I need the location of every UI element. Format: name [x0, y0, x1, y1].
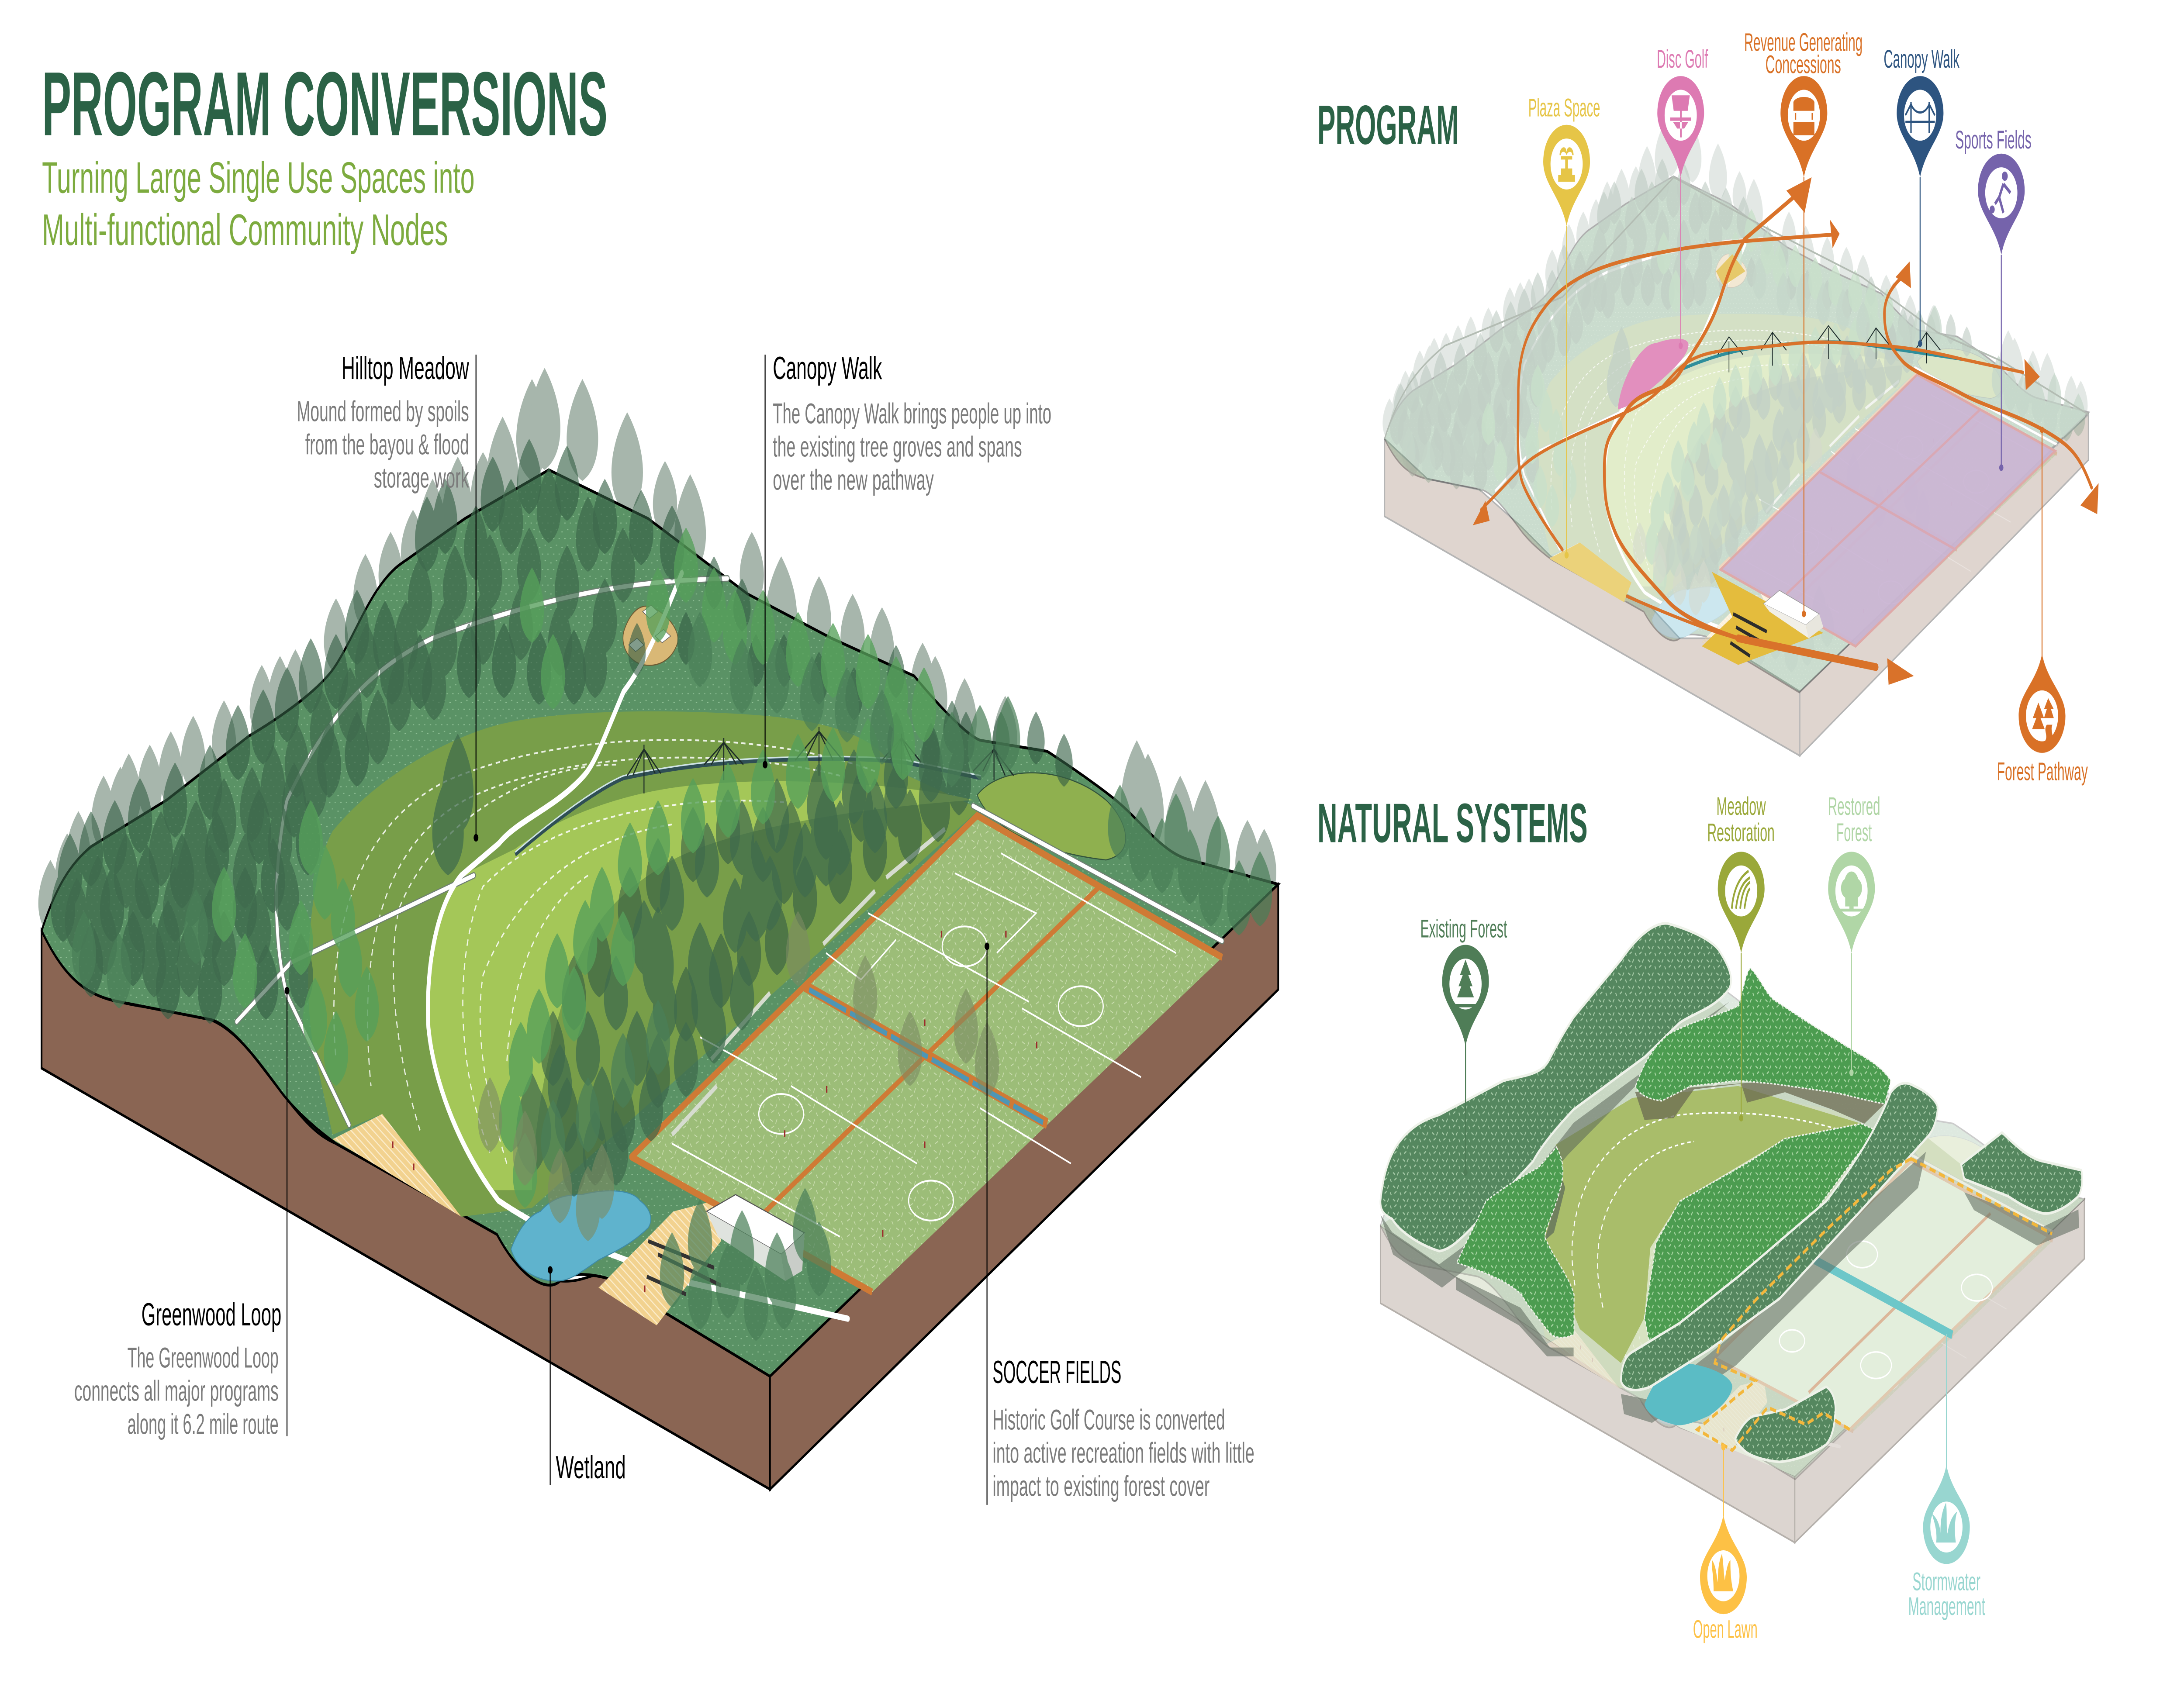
outline [1385, 177, 2088, 439]
panel: natural systems diagram [1380, 793, 2084, 1644]
open lawn fields [1715, 1161, 2049, 1429]
pin: Meadow Restoration [1707, 793, 1775, 1121]
bright lawn [428, 781, 973, 1190]
sports fields area [1721, 375, 2055, 646]
disc golf clearing [623, 606, 678, 665]
icon: reeds [1932, 1503, 1957, 1542]
subtitle: Turning Large Single Use Spaces into [42, 152, 475, 202]
arrow heads [1473, 177, 2098, 685]
canopy walk [1679, 342, 1961, 370]
callout: Soccer Fields: impact to existing forest cover [992, 1470, 1209, 1502]
callout: Hilltop Meadow: Hilltop Meadow [342, 350, 469, 386]
callout: Wetland [548, 1266, 626, 1486]
plaza areas [1549, 542, 1631, 602]
pin: Disc Golf [1657, 45, 1708, 349]
pin: Plaza Space [1528, 94, 1600, 559]
callout: Greenwood Loop: connects all major programs [74, 1375, 279, 1407]
faded terrain and trees [1382, 118, 2089, 693]
callout: Canopy Walk: over the new pathway [773, 464, 934, 496]
pin: Forest Pathway [1997, 427, 2088, 786]
callout: Greenwood Loop: Greenwood Loop [142, 1297, 281, 1333]
pin: Forest Pathway: Forest Pathway [1997, 758, 2088, 786]
pergolas [647, 1241, 721, 1294]
icon: fountain [1558, 147, 1575, 182]
icon: trees and trail [2032, 698, 2054, 742]
meadow contours [1572, 1113, 1841, 1308]
pin: Meadow Restoration: Restoration [1707, 819, 1775, 847]
pin: Disc Golf: Disc Golf [1657, 45, 1708, 73]
callout: Greenwood Loop: along it 6.2 mile route [128, 1408, 279, 1440]
callout: Soccer Fields [985, 942, 1254, 1505]
callout: Soccer Fields: Historic Golf Course is converted [992, 1404, 1225, 1436]
disc golf area [1618, 339, 1689, 410]
pale terrain detail [1380, 963, 2084, 1480]
central orange divider [752, 887, 1100, 1225]
disc golf shelters [629, 605, 670, 652]
existing forest patches [1380, 923, 2082, 1462]
meadow restoration [1545, 1086, 1862, 1363]
open lawn boundary [1697, 1159, 2052, 1450]
title: PROGRAM CONVERSIONS [42, 53, 608, 155]
icon: meadow grasses [1732, 871, 1750, 909]
soil left face [41, 931, 770, 1489]
back ridge trees [38, 368, 1276, 935]
callout: Canopy Walk: the existing tree groves and spans [773, 431, 1022, 463]
people markers [392, 931, 1037, 1292]
soccer fields [632, 816, 1222, 1292]
pin: Stormwater Management: Management [1908, 1593, 1985, 1621]
callout: Soccer Fields: into active recreation fields with little [992, 1437, 1254, 1469]
shadow under restored hilltop patch [1635, 1081, 1891, 1124]
bridge masts [1718, 326, 1940, 373]
forest pathways [237, 579, 1222, 1125]
canopy walk bridge [515, 727, 1014, 854]
pin: Restored Forest: Restored [1828, 793, 1880, 821]
heading: Natural Systems: NATURAL SYSTEMS [1317, 793, 1588, 854]
concession building [706, 1194, 805, 1281]
pergolas [1731, 614, 1767, 656]
callout: Hilltop Meadow: Mound formed by spoils [297, 395, 469, 428]
outer meadow [308, 711, 980, 1217]
callout: Canopy Walk [763, 350, 1051, 769]
meadow contour lines [334, 740, 875, 1163]
pin: Revenue Generating Concessions: Concessions [1766, 51, 1841, 79]
panel: program diagram [1382, 28, 2098, 786]
pin: Existing Forest [1420, 915, 1507, 1176]
shadow beside restored west patch [1544, 1179, 1565, 1241]
pin: Stormwater Management: Stormwater [1912, 1568, 1980, 1596]
pin: Sports Fields [1955, 126, 2032, 471]
terrain surface [41, 470, 1278, 1377]
restored forest patches [1457, 968, 1891, 1338]
pin: Canopy Walk: Canopy Walk [1883, 45, 1959, 73]
soil right face [770, 884, 1278, 1489]
restored forest strip [1645, 1124, 1876, 1343]
stormwater swale [1814, 1260, 1952, 1335]
icon: bridge [1905, 102, 1935, 133]
heading: Program: PROGRAM [1317, 94, 1459, 156]
icon: pine trees [1452, 959, 1480, 1007]
pin: Restored Forest [1828, 793, 1880, 1076]
shadows under patches [1380, 1002, 2079, 1423]
callout: Hilltop Meadow [297, 350, 478, 842]
subtitle [42, 152, 475, 254]
pin: Canopy Walk [1883, 45, 1959, 347]
callout: Canopy Walk: The Canopy Walk brings people up into [773, 397, 1051, 430]
callout: Soccer Fields: SOCCER FIELDS [992, 1354, 1121, 1390]
icon: grass tuft [1712, 1554, 1733, 1591]
concession building [1763, 590, 1823, 638]
tree canopy [51, 439, 1272, 1341]
plaza south [598, 1201, 721, 1325]
block faces [1380, 1199, 2084, 1542]
callout: Canopy Walk: Canopy Walk [773, 350, 882, 386]
subtitle: Multi-functional Community Nodes [42, 205, 448, 254]
pin: Open Lawn: Open Lawn [1693, 1615, 1758, 1644]
wetland [511, 1191, 651, 1281]
drainage swale [805, 986, 1047, 1124]
light poles and bleachers [672, 829, 945, 1135]
disc basket clearing [1716, 254, 1745, 286]
pin: Meadow Restoration: Meadow [1716, 793, 1766, 821]
circulation arrows [1481, 195, 2091, 667]
pin: Restored Forest: Forest [1836, 819, 1872, 847]
icon: disc golf basket [1670, 95, 1691, 138]
panel: main block isometric [41, 439, 1278, 1489]
pale ground [1380, 953, 2084, 1476]
pin: Stormwater Management [1908, 1334, 1985, 1621]
callout: Hilltop Meadow: from the bayou & flood [305, 428, 469, 461]
pin: Revenue Generating Concessions: Revenue Generating [1744, 28, 1863, 57]
ground [41, 470, 1278, 1377]
wetland water [1645, 1363, 1732, 1425]
block faces [1385, 414, 2088, 756]
callout: Greenwood Loop [74, 987, 289, 1440]
pin: Plaza Space: Plaza Space [1528, 94, 1600, 122]
field markings [672, 853, 1176, 1237]
pin: Sports Fields: Sports Fields [1955, 126, 2032, 154]
pin: Existing Forest: Existing Forest [1420, 915, 1507, 943]
pin: Open Lawn [1693, 1444, 1758, 1644]
icon: soccer player [1990, 172, 2011, 214]
callout: Hilltop Meadow: storage work [374, 462, 469, 494]
callout: Greenwood Loop: The Greenwood Loop [128, 1341, 279, 1374]
pin: Revenue Generating Concessions [1744, 28, 1863, 617]
plaza west [333, 1114, 461, 1217]
icon: broadleaf trees [1838, 872, 1865, 911]
right meadow patch [977, 773, 1126, 860]
callout: Wetland: Wetland [556, 1449, 626, 1486]
icon: market stall [1794, 97, 1814, 135]
